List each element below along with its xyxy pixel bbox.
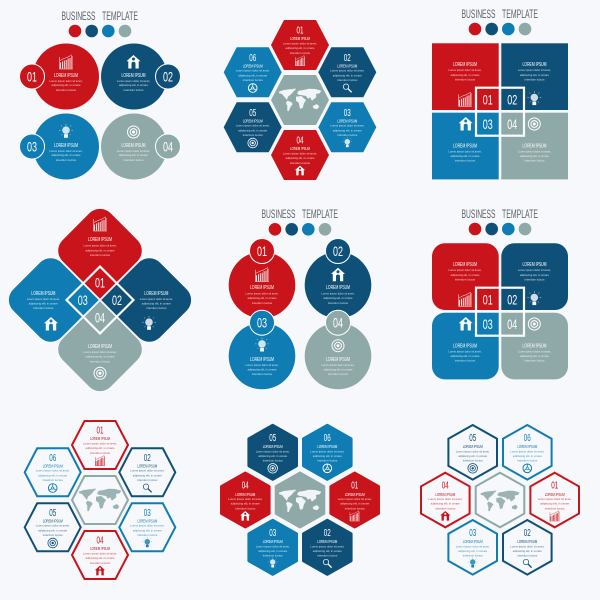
item 03: Lorem ipsum dolor sit amet, (448, 149, 482, 153)
hexagon 05: interdum luctus (243, 133, 263, 137)
center number grid: 01 (483, 291, 493, 307)
item 02: adipiscing elit, in ornare (324, 296, 353, 300)
item 02 (305, 238, 371, 318)
hexagon 04: adipiscing elit, in ornare (231, 502, 260, 506)
item 04 (52, 301, 148, 397)
hexagon 02: LOREM IPSUM (137, 463, 158, 468)
item 01: interdum luctus (90, 253, 110, 257)
legend dots (269, 223, 331, 236)
item 01: LOREM IPSUM (453, 62, 477, 68)
item 02: interdum luctus (146, 306, 167, 310)
hexagon 05: Lorem ipsum dolor sit amet, (456, 449, 490, 453)
hexagon 05 (249, 425, 296, 479)
center number diamond: 03 (78, 292, 88, 308)
hexagon 03: interdum luctus (137, 533, 158, 537)
item 03: Lorem ipsum dolor sit amet, (246, 363, 279, 367)
center number diamond: 02 (112, 292, 122, 308)
item 03: 03 (257, 315, 267, 331)
item 04: LOREM IPSUM (522, 344, 546, 350)
hexagon 03: adipiscing elit, in ornare (458, 549, 487, 553)
hexagon 04: Lorem ipsum dolor sit amet, (83, 551, 117, 555)
hexagon 01 (271, 20, 329, 70)
hexagon 03: 03 (469, 528, 476, 539)
item 03: LOREM IPSUM (54, 143, 78, 149)
panel: outlined flat hexagons (25, 421, 175, 579)
hexagon 02: LOREM IPSUM (317, 539, 338, 544)
item 01: Lorem ipsum dolor sit amet, (84, 244, 117, 248)
item 01: interdum luctus (252, 301, 272, 305)
hexagon 03: Lorem ipsum dolor sit amet, (256, 544, 290, 548)
hexagon 04 (421, 473, 470, 527)
center number grid: 03 (483, 316, 493, 332)
item 02: Lorem ipsum dolor sit amet, (117, 79, 150, 83)
item 03: LOREM IPSUM (453, 344, 477, 350)
item 04: interdum luctus (524, 159, 545, 163)
hexagon 05: 05 (269, 433, 276, 444)
center hexagon with world map (276, 473, 324, 527)
hexagon 04: Lorem ipsum dolor sit amet, (228, 497, 262, 501)
hexagon 02: Lorem ipsum dolor sit amet, (310, 544, 344, 548)
item 01: Lorem ipsum dolor sit amet, (50, 79, 83, 83)
hexagon 01: Lorem ipsum dolor sit amet, (283, 41, 317, 45)
item 01: LOREM IPSUM (88, 237, 112, 243)
hexagon 01: Lorem ipsum dolor sit amet, (338, 497, 372, 501)
legend dots (469, 223, 531, 235)
hexagon 04: Lorem ipsum dolor sit amet, (283, 151, 317, 155)
panel: rounded quadrants (432, 207, 568, 379)
item 04: LOREM IPSUM (326, 357, 350, 363)
item 04: Lorem ipsum dolor sit amet, (518, 149, 551, 153)
item 02: 02 (333, 243, 343, 259)
hexagon 05: Lorem ipsum dolor sit amet, (256, 449, 290, 453)
hexagon 02: 02 (324, 528, 331, 539)
item 02: Lorem ipsum dolor sit amet, (518, 68, 551, 72)
hexagon 02: interdum luctus (137, 478, 158, 482)
panel: four circles (20, 9, 180, 180)
center number grid (476, 288, 524, 336)
hexagon 06: interdum luctus (43, 478, 63, 482)
item 01: LOREM IPSUM (453, 262, 477, 268)
item 04: Lorem ipsum dolor sit amet, (322, 363, 355, 367)
hexagon 01: interdum luctus (345, 506, 365, 510)
hexagon 03: LOREM IPSUM (137, 518, 158, 523)
item 03: adipiscing elit, in ornare (29, 301, 58, 305)
item 02: LOREM IPSUM (522, 262, 546, 268)
item 04: Lorem ipsum dolor sit amet, (84, 350, 117, 354)
hexagon 06: 06 (324, 433, 331, 444)
hexagon 03: 03 (144, 508, 151, 519)
item 01: adipiscing elit, in ornare (86, 248, 115, 252)
item 02: interdum luctus (328, 301, 348, 305)
center number grid: 02 (507, 91, 517, 107)
hexagon 06: 06 (249, 53, 256, 64)
hexagon 02 (304, 520, 351, 574)
hexagon 02 (119, 448, 175, 496)
item 02: interdum luctus (524, 77, 545, 81)
item 01: Lorem ipsum dolor sit amet, (246, 291, 279, 295)
item 01: adipiscing elit, in ornare (52, 83, 81, 87)
center number grid: 04 (507, 316, 517, 332)
center hexagon with world map (476, 473, 524, 527)
item 02: 02 (163, 68, 173, 84)
item 02: adipiscing elit, in ornare (142, 301, 171, 305)
center number diamond (66, 266, 134, 334)
item 04: interdum luctus (90, 359, 110, 363)
hexagon 01 (331, 473, 378, 527)
hexagon 02: 02 (524, 528, 531, 539)
hexagon 02: adipiscing elit, in ornare (313, 549, 342, 553)
item 03: interdum luctus (455, 159, 475, 163)
hexagon 01: interdum luctus (90, 451, 110, 455)
hexagon 04: 04 (296, 136, 304, 147)
hexagon 02 (503, 520, 552, 575)
hexagon 02: interdum luctus (317, 554, 338, 558)
hexagon 03 (249, 520, 296, 574)
hexagon 05: LOREM IPSUM (243, 119, 263, 124)
item 03: 03 (27, 138, 37, 154)
item 01: LOREM IPSUM (54, 73, 78, 79)
hexagon 06: Lorem ipsum dolor sit amet, (310, 449, 344, 453)
item 02: adipiscing elit, in ornare (119, 83, 148, 87)
item 04: LOREM IPSUM (122, 143, 146, 149)
center hexagon with world map (72, 476, 128, 524)
hexagon 04 (72, 531, 128, 579)
item 01 (20, 44, 99, 110)
hexagon 01: adipiscing elit, in ornare (540, 502, 569, 506)
item 03: Lorem ipsum dolor sit amet, (50, 149, 83, 153)
hexagon 06 (304, 425, 351, 479)
hexagon 05 (448, 425, 497, 480)
item 02: LOREM IPSUM (144, 291, 168, 297)
title: TEMPLATE (502, 7, 538, 21)
hexagon 01: 01 (351, 481, 358, 492)
hexagon 04: LOREM IPSUM (235, 492, 256, 497)
item 02: LOREM IPSUM (522, 62, 546, 68)
item 02: adipiscing elit, in ornare (520, 73, 549, 77)
hexagon 06 (25, 448, 81, 496)
hexagon 05: adipiscing elit, in ornare (258, 454, 287, 458)
hexagon 06: LOREM IPSUM (317, 444, 338, 449)
hexagon 01: interdum luctus (290, 51, 310, 55)
item 03 (432, 113, 499, 179)
hexagon 03: LOREM IPSUM (263, 539, 283, 544)
hexagon 02 (318, 47, 376, 97)
hexagon 05: 05 (249, 108, 256, 119)
hexagon 06: adipiscing elit, in ornare (38, 473, 67, 477)
hexagon 01 (72, 421, 128, 469)
hexagon 01: 01 (296, 26, 304, 37)
item 03: adipiscing elit, in ornare (52, 153, 81, 157)
hexagon 02: Lorem ipsum dolor sit amet, (130, 469, 164, 473)
hexagon 06 (503, 425, 552, 480)
hexagon 04: adipiscing elit, in ornare (86, 556, 115, 560)
hexagon 02: 02 (344, 53, 351, 64)
panel: square quadrants (432, 7, 568, 179)
item 03: Lorem ipsum dolor sit amet, (448, 350, 482, 354)
item 04: adipiscing elit, in ornare (86, 355, 115, 359)
hexagon 01: adipiscing elit, in ornare (286, 46, 315, 50)
item 03: Lorem ipsum dolor sit amet, (27, 297, 60, 301)
item 04: LOREM IPSUM (522, 143, 546, 149)
hexagon 05: 05 (469, 433, 476, 444)
hexagon 02: adipiscing elit, in ornare (133, 473, 162, 477)
hexagon 05: interdum luctus (463, 459, 483, 463)
hexagon 06: Lorem ipsum dolor sit amet, (36, 469, 70, 473)
hexagon 03: adipiscing elit, in ornare (333, 128, 362, 132)
legend dots (469, 23, 531, 35)
hexagon 05: adipiscing elit, in ornare (458, 454, 487, 458)
hexagon 06: Lorem ipsum dolor sit amet, (510, 449, 544, 453)
hexagon 04: interdum luctus (235, 506, 256, 510)
legend dots (69, 25, 131, 37)
panel: solid flat hexagons (224, 20, 376, 180)
item 01: 01 (257, 243, 267, 259)
hexagon 04: interdum luctus (290, 161, 310, 165)
title: TEMPLATE (502, 207, 538, 221)
title: BUSINESS (462, 7, 496, 21)
hexagon 03: Lorem ipsum dolor sit amet, (330, 124, 364, 128)
hexagon 01: 01 (96, 426, 104, 437)
item 04: adipiscing elit, in ornare (324, 368, 353, 372)
panel: solid pointed hexagons (222, 425, 379, 574)
item 04: 04 (333, 315, 343, 331)
center number grid: 02 (507, 291, 517, 307)
item 03 (432, 313, 499, 379)
item 04: adipiscing elit, in ornare (520, 154, 549, 158)
item 02: adipiscing elit, in ornare (520, 273, 549, 277)
hexagon 05: LOREM IPSUM (463, 444, 483, 449)
title: TEMPLATE (102, 9, 138, 23)
title: BUSINESS (462, 207, 496, 221)
hexagon 04: LOREM IPSUM (435, 492, 456, 497)
item 01: interdum luctus (56, 88, 76, 92)
panel: rounded diamonds (3, 203, 197, 397)
item 02: Lorem ipsum dolor sit amet, (518, 268, 551, 272)
hexagon 02: interdum luctus (517, 554, 538, 558)
hexagon 05: 05 (49, 508, 56, 519)
item 01: interdum luctus (455, 277, 475, 281)
hexagon 03: Lorem ipsum dolor sit amet, (456, 544, 490, 548)
item 04: Lorem ipsum dolor sit amet, (117, 149, 150, 153)
hexagon 05: Lorem ipsum dolor sit amet, (36, 524, 70, 528)
hexagon 03: Lorem ipsum dolor sit amet, (130, 524, 164, 528)
hexagon 04: interdum luctus (435, 506, 456, 510)
item 03 (229, 310, 295, 389)
hexagon 05: adipiscing elit, in ornare (238, 128, 267, 132)
hexagon 06: 06 (524, 433, 531, 444)
item 02: LOREM IPSUM (326, 285, 350, 291)
item 02 (501, 43, 568, 110)
hexagon 04: LOREM IPSUM (90, 546, 110, 551)
item 01: adipiscing elit, in ornare (450, 73, 480, 77)
hexagon 06: adipiscing elit, in ornare (238, 73, 267, 77)
hexagon 05: interdum luctus (43, 533, 63, 537)
hexagon 03: interdum luctus (337, 133, 358, 137)
hexagon 03: adipiscing elit, in ornare (258, 549, 287, 553)
hexagon 01: LOREM IPSUM (290, 36, 310, 41)
hexagon 03: interdum luctus (263, 554, 283, 558)
hexagon 03: interdum luctus (463, 554, 483, 558)
hexagon 01: interdum luctus (545, 506, 565, 510)
item 04: 04 (163, 138, 173, 154)
hexagon 04: 04 (96, 536, 104, 547)
hexagon 03: LOREM IPSUM (337, 119, 358, 124)
item 01 (52, 203, 148, 299)
hexagon 06: adipiscing elit, in ornare (513, 454, 542, 458)
item 01 (432, 43, 499, 110)
item 04: interdum luctus (328, 372, 348, 376)
hexagon 04: 04 (242, 481, 249, 492)
item 03 (3, 252, 99, 348)
hexagon 04: interdum luctus (90, 561, 110, 565)
hexagon 05 (25, 503, 81, 551)
hexagon 06: LOREM IPSUM (43, 463, 63, 468)
center number grid (476, 88, 524, 136)
hexagon 01: adipiscing elit, in ornare (340, 502, 369, 506)
item 04 (101, 114, 180, 180)
item 03: LOREM IPSUM (250, 357, 274, 363)
item 01: adipiscing elit, in ornare (450, 273, 480, 277)
hexagon 06: interdum luctus (317, 459, 338, 463)
item 03: adipiscing elit, in ornare (450, 354, 480, 358)
item 02 (101, 252, 197, 348)
hexagon 05 (224, 102, 282, 152)
hexagon 02: interdum luctus (337, 78, 358, 82)
hexagon 04: LOREM IPSUM (290, 146, 310, 151)
hexagon 03: 03 (344, 108, 351, 119)
hexagon 02: LOREM IPSUM (517, 539, 538, 544)
item 03: interdum luctus (33, 306, 54, 310)
hexagon 03: LOREM IPSUM (463, 539, 483, 544)
hexagon 06: interdum luctus (517, 459, 538, 463)
hexagon 03 (448, 520, 497, 575)
hexagon 06: interdum luctus (243, 78, 263, 82)
hexagon 03: 03 (269, 528, 276, 539)
hexagon 04: 04 (442, 481, 449, 492)
item 04: adipiscing elit, in ornare (119, 153, 148, 157)
hexagon 04 (222, 473, 269, 527)
item 04 (501, 113, 568, 179)
panel: stacked circles (229, 207, 371, 389)
center hexagon with world map (271, 75, 329, 125)
item 03: interdum luctus (56, 158, 76, 162)
item 01: Lorem ipsum dolor sit amet, (448, 268, 482, 272)
item 03: LOREM IPSUM (453, 143, 477, 149)
item 02: LOREM IPSUM (122, 73, 146, 79)
center number grid: 04 (507, 116, 517, 132)
item 04 (305, 310, 371, 389)
hexagon 06 (224, 47, 282, 97)
hexagon 06: 06 (49, 453, 56, 464)
item 02: interdum luctus (124, 88, 144, 92)
item 02 (101, 44, 180, 110)
title: TEMPLATE (302, 207, 338, 221)
hexagon 04: adipiscing elit, in ornare (286, 156, 315, 160)
hexagon 02: adipiscing elit, in ornare (513, 549, 542, 553)
panel: outlined pointed hexagons (421, 425, 579, 575)
center number diamond: 01 (95, 275, 105, 291)
item 01: 01 (27, 68, 37, 84)
item 04: interdum luctus (524, 359, 545, 363)
hexagon 01: LOREM IPSUM (345, 492, 365, 497)
item 01 (432, 243, 499, 310)
item 01: LOREM IPSUM (250, 285, 274, 291)
hexagon 05: LOREM IPSUM (43, 518, 63, 523)
item 01: Lorem ipsum dolor sit amet, (448, 68, 482, 72)
item 01 (229, 238, 295, 318)
hexagon 03 (119, 503, 175, 551)
item 02 (501, 243, 568, 310)
item 03: interdum luctus (455, 359, 475, 363)
hexagon 02: Lorem ipsum dolor sit amet, (510, 544, 544, 548)
item 02: interdum luctus (524, 277, 545, 281)
item 03 (20, 114, 99, 180)
hexagon 06: Lorem ipsum dolor sit amet, (236, 69, 270, 73)
item 03: adipiscing elit, in ornare (450, 154, 480, 158)
hexagon 01: adipiscing elit, in ornare (86, 446, 115, 450)
hexagon 03 (318, 102, 376, 152)
hexagon 05: adipiscing elit, in ornare (38, 528, 67, 532)
item 02: Lorem ipsum dolor sit amet, (140, 297, 173, 301)
item 03: adipiscing elit, in ornare (248, 368, 277, 372)
hexagon 02: LOREM IPSUM (337, 64, 358, 69)
hexagon 01: LOREM IPSUM (545, 492, 565, 497)
hexagon 02: adipiscing elit, in ornare (333, 73, 362, 77)
item 04: adipiscing elit, in ornare (520, 354, 549, 358)
item 03: LOREM IPSUM (31, 291, 55, 297)
hexagon 02: 02 (144, 453, 151, 464)
hexagon 06: LOREM IPSUM (517, 444, 538, 449)
hexagon 01: 01 (551, 481, 558, 492)
hexagon 05: LOREM IPSUM (263, 444, 283, 449)
center number grid: 03 (483, 116, 493, 132)
item 04: LOREM IPSUM (88, 344, 112, 350)
item 04: interdum luctus (124, 158, 144, 162)
center number grid: 01 (483, 91, 493, 107)
hexagon 02: Lorem ipsum dolor sit amet, (330, 69, 364, 73)
center number diamond: 04 (95, 309, 105, 325)
hexagon 05: Lorem ipsum dolor sit amet, (236, 124, 270, 128)
hexagon 01: LOREM IPSUM (90, 436, 110, 441)
hexagon 01: Lorem ipsum dolor sit amet, (538, 497, 572, 501)
hexagon 05: interdum luctus (263, 459, 283, 463)
item 04: Lorem ipsum dolor sit amet, (518, 350, 551, 354)
hexagon 04 (271, 130, 329, 180)
hexagon 04: adipiscing elit, in ornare (431, 502, 460, 506)
hexagon 01: Lorem ipsum dolor sit amet, (83, 441, 117, 445)
hexagon 06: adipiscing elit, in ornare (313, 454, 342, 458)
item 03: interdum luctus (252, 372, 272, 376)
title: BUSINESS (62, 9, 96, 23)
item 01: interdum luctus (455, 77, 475, 81)
item 01: adipiscing elit, in ornare (248, 296, 277, 300)
hexagon 04: Lorem ipsum dolor sit amet, (428, 497, 462, 501)
title: BUSINESS (262, 207, 296, 221)
item 04 (501, 313, 568, 379)
hexagon 01 (530, 473, 579, 527)
hexagon 03: adipiscing elit, in ornare (133, 528, 162, 532)
hexagon 06: LOREM IPSUM (243, 64, 263, 69)
item 02: Lorem ipsum dolor sit amet, (322, 291, 355, 295)
